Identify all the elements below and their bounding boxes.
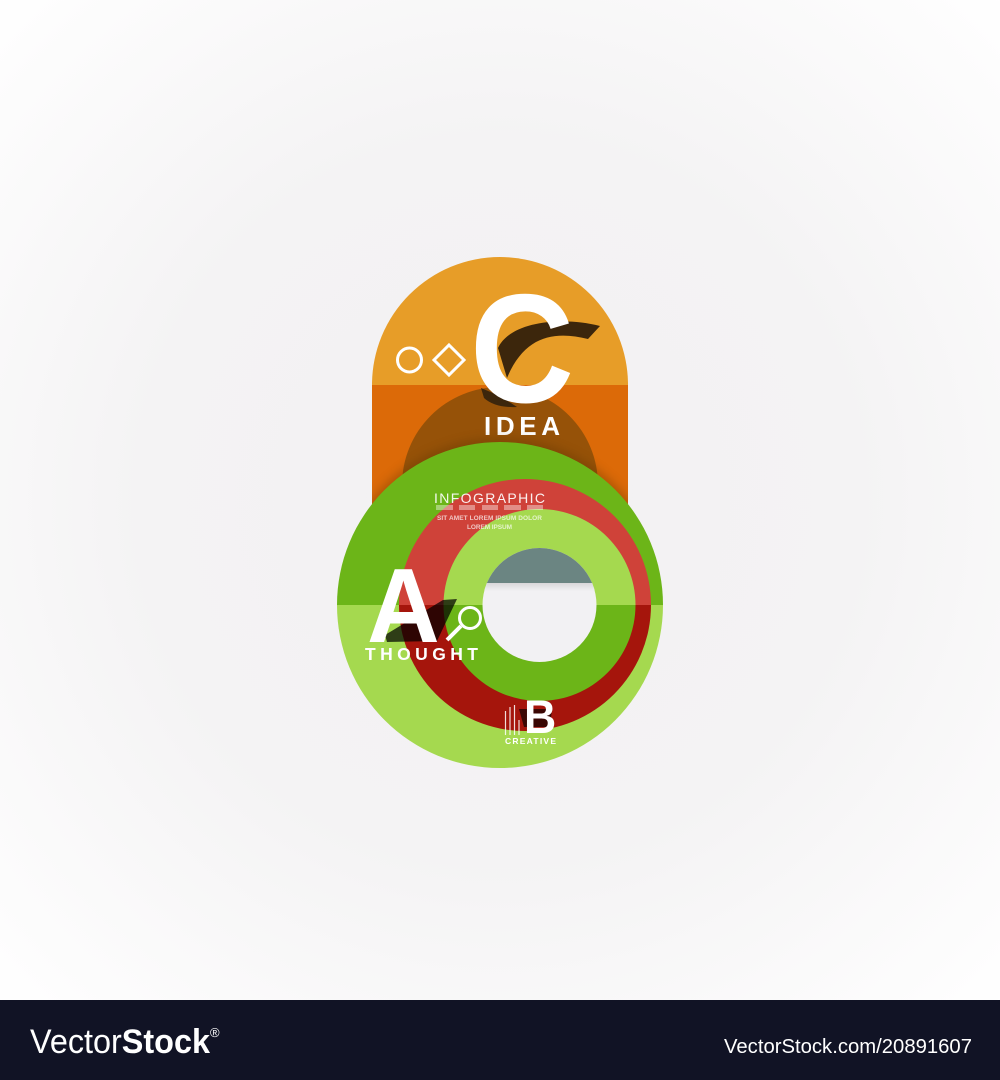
body copy [437,515,542,531]
icon: diamond outline [434,345,464,375]
section A thought [365,546,480,665]
middle ring lower half [399,605,651,731]
letter A: A [367,546,440,665]
infographic heading: INFOGRAPHIC [434,490,545,506]
icon: magnifier [447,608,480,640]
footer reference: VectorStock.com/20891607 [724,1036,972,1058]
panel: donut diagram [337,442,663,768]
letter C: C [470,262,574,435]
centre hole [482,548,596,662]
registered mark: ® [210,1025,220,1040]
inner ring lower half [444,605,636,701]
footer logo: VectorStock [30,1023,211,1061]
letter B: B [524,691,556,743]
C letter shadow [481,321,600,407]
icon: circle outline [398,348,422,372]
icon: vertical bars [506,705,519,735]
B letter shadow [519,709,552,727]
orange tab lower band [372,385,628,510]
IDEA label: IDEA [484,411,560,441]
A letter shadow [385,599,457,642]
centre hole grey cap [487,548,592,583]
dashed divider bars [436,505,543,510]
footer bar [0,1000,1000,1080]
section B creative [505,691,556,746]
outer ring upper half [337,442,663,605]
green circle soft shadow [372,432,628,504]
body copy: LOREM IPSUM [467,524,512,531]
CREATIVE label: CREATIVE [505,736,556,746]
centre hole shading [480,583,600,591]
body copy: SIT AMET LOREM IPSUM DOLOR [437,515,542,522]
inner ring upper half [444,509,636,605]
orange tab top half [372,257,628,385]
panel: orange C tab [372,257,628,504]
middle ring upper half [399,479,651,605]
THOUGHT label: THOUGHT [365,644,478,664]
outer ring lower half [337,605,663,768]
brown semicircle [402,388,598,474]
